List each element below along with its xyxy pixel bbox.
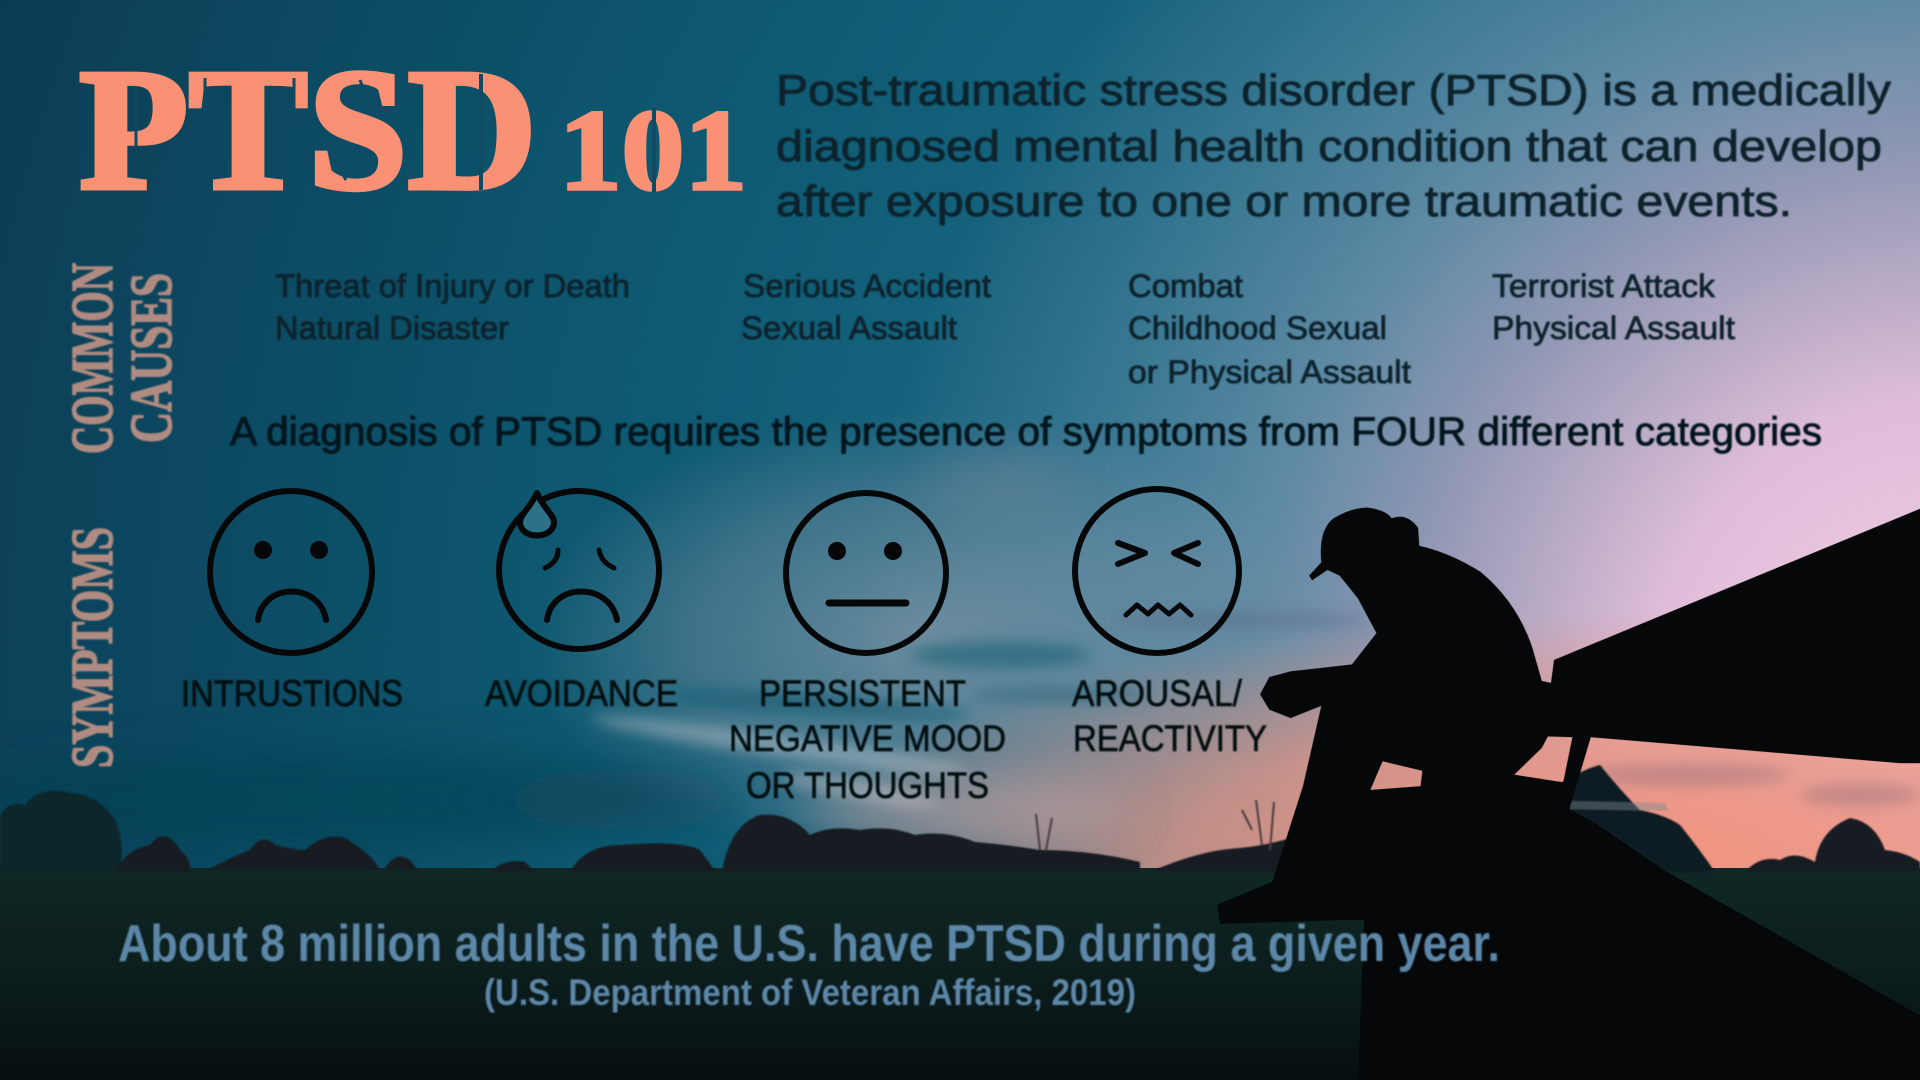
cause column 3: Childhood Sexual [1128,310,1387,346]
side label: common causes: COMMON [59,263,125,454]
label: arousal reactivity: REACTIVITY [1073,718,1267,759]
icon: neutral face [786,493,946,653]
cause column 1: Natural Disaster [275,310,509,346]
cause column 3 [1128,268,1411,390]
side label: common causes [59,263,184,454]
intro paragraph: after exposure to one or more traumatic events. [776,177,1792,226]
label: intrusions: INTRUSTIONS [181,673,403,714]
cause column 3: Combat [1128,268,1243,304]
intro paragraph: diagnosed mental health condition that can develop [776,122,1882,171]
cause column 4 [1492,268,1735,346]
title: PTSD 101 [79,33,747,226]
title word PTSD: PTSD [79,33,537,226]
cause column 1: Threat of Injury or Death [275,268,630,304]
symptom category labels [181,673,1267,806]
label: persistent negative mood [729,673,1006,806]
tree line on the horizon [0,765,1920,872]
diagnosis statement: A diagnosis of PTSD requires the presence of symptoms from FOUR different categories [230,410,1822,454]
common causes list [275,268,1735,390]
label: persistent negative mood: PERSISTENT [759,673,966,714]
icon: wincing face [1075,489,1239,653]
title number 101: 101 [559,87,747,215]
label: persistent negative mood: OR THOUGHTS [746,765,989,806]
icon: sad face [210,491,372,653]
cause column 3: or Physical Assault [1128,354,1411,390]
silhouette: man seated on bench [1217,508,1920,1080]
cause column 1 [275,268,630,346]
statistic callout [118,915,1500,1013]
intro paragraph [776,66,1891,226]
label: arousal reactivity: AROUSAL/ [1072,673,1243,714]
cause column 2: Serious Accident [743,268,991,304]
intro paragraph: Post-traumatic stress disorder (PTSD) is a medically [776,66,1891,115]
icon: sweating worried face [499,491,659,649]
statistic headline: About 8 million adults in the U.S. have PTSD during a given year. [118,915,1500,973]
source citation: (U.S. Department of Veteran Affairs, 2019) [484,972,1136,1013]
cause column 4: Terrorist Attack [1492,268,1716,304]
label: arousal reactivity [1072,673,1267,759]
label: persistent negative mood: NEGATIVE MOOD [729,718,1006,759]
cause column 2 [741,268,991,346]
side label: common causes: CAUSES [118,273,184,443]
label: avoidance: AVOIDANCE [485,673,678,714]
cause column 2: Sexual Assault [741,310,957,346]
cause column 4: Physical Assault [1492,310,1735,346]
side label: symptoms: SYMPTOMS [59,527,125,768]
